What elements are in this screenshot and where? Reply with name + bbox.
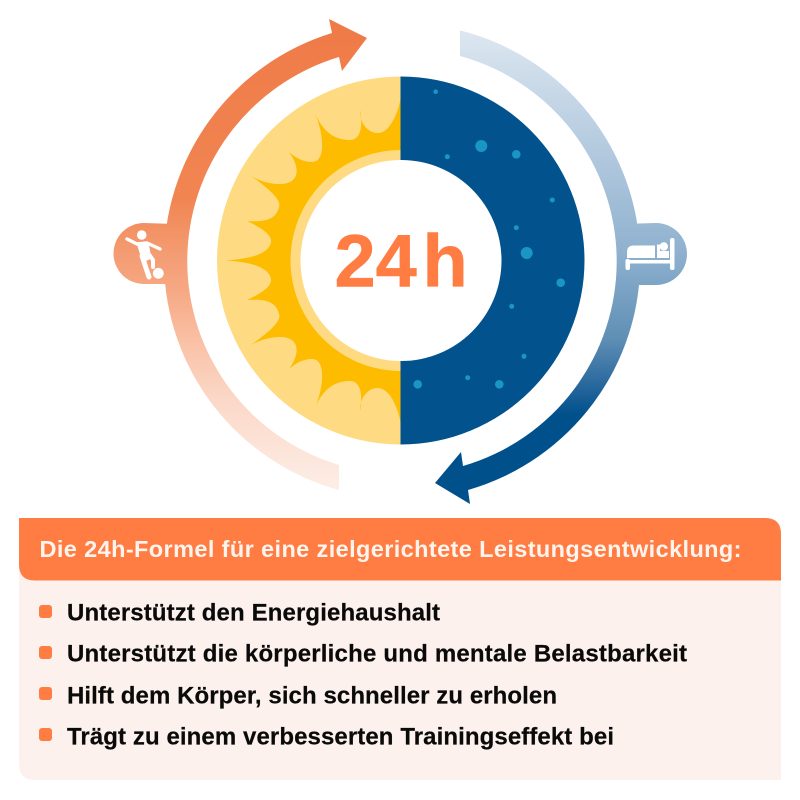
- arrow: sleep night cycle: [435, 30, 687, 504]
- panel header: Die 24h-Formel für eine zielgerichtete Leistungsentwicklung:: [40, 536, 742, 562]
- center circle: [300, 160, 502, 361]
- center label 24h: h: [422, 220, 468, 302]
- benefit 1: Unterstützt den Energiehaushalt: [67, 600, 440, 627]
- benefit 4: Trägt zu einem verbesserten Trainingseffekt bei: [67, 723, 614, 750]
- icon: football player: [127, 230, 164, 279]
- panel header: [19, 518, 781, 580]
- moon half with stars: [400, 76, 584, 445]
- panel: benefits: [19, 518, 781, 780]
- sun half: [217, 76, 401, 445]
- icon: bed: [626, 238, 674, 270]
- arrow: activity day cycle: [113, 19, 367, 490]
- benefit 3: Hilft dem Körper, sich schneller zu erholen: [67, 682, 557, 709]
- center label 24h: 24: [334, 220, 417, 302]
- benefit 2: Unterstützt die körperliche und mentale Belastbarkeit: [67, 641, 687, 668]
